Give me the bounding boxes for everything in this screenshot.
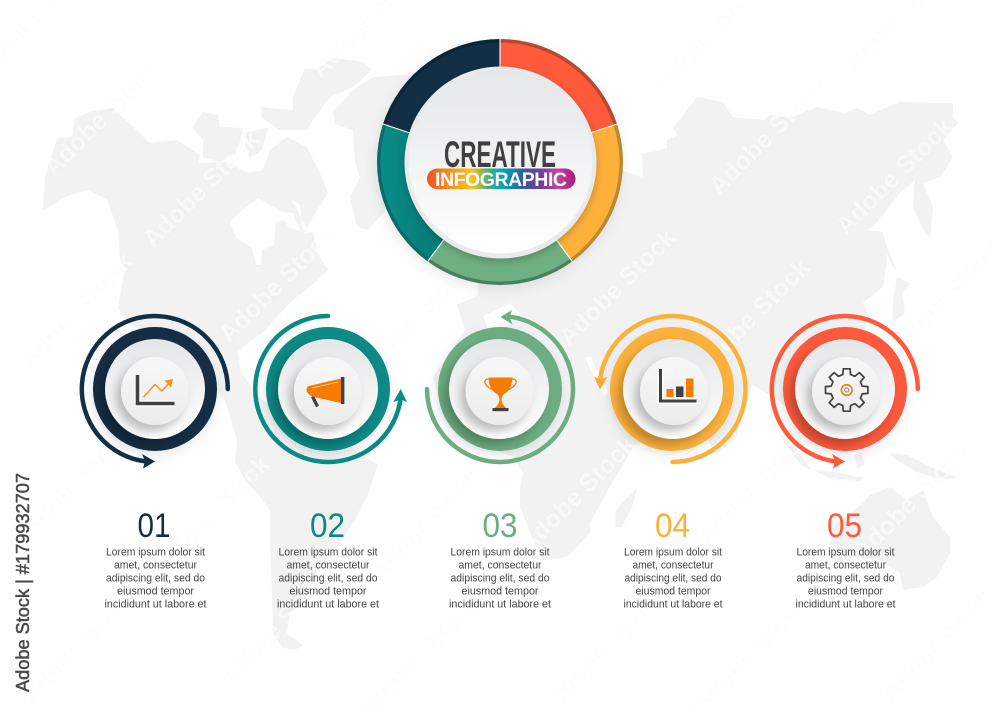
icon: line chart	[138, 375, 174, 404]
text block 3	[449, 507, 551, 610]
watermarks: Adobe Stock	[872, 580, 1000, 707]
side credit: Adobe Stock | #179932707	[13, 473, 33, 692]
body copy: incididunt ut labore et	[449, 598, 551, 610]
segment: navy	[386, 42, 500, 162]
arctic islands	[192, 58, 372, 162]
body copy: incididunt ut labore et	[104, 598, 206, 610]
ring	[610, 327, 734, 451]
centre disc	[404, 66, 596, 258]
body copy: amet, consectetur	[632, 560, 714, 572]
ring	[266, 327, 390, 451]
watermarks: Adobe Stock	[38, 53, 166, 181]
step 4	[594, 316, 745, 462]
body copy: amet, consectetur	[805, 560, 886, 572]
body copy: Lorem ipsum dolor sit	[624, 546, 722, 558]
ring	[783, 327, 907, 451]
body copy: eiusmod tempor	[290, 586, 367, 598]
ring	[93, 327, 217, 451]
island: Madagascar	[615, 488, 637, 527]
watermarks: Adobe Stock	[147, 450, 275, 578]
body copy: incididunt ut labore et	[796, 598, 896, 610]
ring	[438, 327, 562, 451]
body copy: adipiscing elit, sed do	[796, 572, 894, 584]
number 01: 01	[138, 507, 170, 545]
segment: red	[500, 42, 614, 162]
body copy: Lorem ipsum dolor sit	[796, 546, 894, 558]
watermarks: Adobe Stock	[10, 247, 138, 375]
icon: trophy	[485, 378, 516, 411]
outer disc	[623, 339, 723, 439]
body copy: eiusmod tempor	[636, 586, 711, 598]
arrow	[427, 310, 573, 462]
watermarks: Adobe Stock	[513, 430, 641, 558]
Greenland	[333, 74, 415, 230]
body copy: adipiscing elit, sed do	[450, 572, 550, 584]
body copy: amet, consectetur	[114, 560, 197, 572]
inner disc	[466, 357, 534, 425]
donut rim	[377, 39, 623, 285]
text block 4	[624, 507, 722, 610]
continents: Eurasia and Africa	[433, 97, 958, 560]
segment: teal	[381, 125, 500, 259]
arrow	[82, 316, 228, 468]
watermarks: Adobe Stock	[353, 255, 481, 383]
step 3	[427, 310, 573, 462]
icon: bar chart	[660, 369, 696, 401]
watermarks: Adobe Stock	[13, 417, 141, 545]
watermarks: Adobe Stock	[687, 253, 815, 381]
body copy	[104, 546, 206, 610]
centre disc face	[408, 70, 592, 254]
watermarks: Adobe Stock	[703, 72, 831, 200]
icon: megaphone	[306, 377, 344, 406]
segment: green	[430, 162, 570, 282]
watermarks: Adobe Stock	[830, 112, 958, 240]
watermarks: Adobe Stock	[553, 223, 681, 351]
text block 2	[277, 507, 379, 610]
body copy: incididunt ut labore et	[277, 598, 379, 610]
outer disc	[795, 339, 895, 439]
body copy: Lorem ipsum dolor sit	[106, 546, 205, 558]
outer disc	[105, 339, 205, 439]
body copy: amet, consectetur	[286, 560, 370, 572]
continent: Australia	[830, 487, 950, 590]
panel: central donut	[377, 39, 623, 285]
watermarks: Adobe Stock	[137, 125, 265, 253]
step 2	[255, 316, 407, 462]
body copy: adipiscing elit, sed do	[278, 572, 378, 584]
watermarks: Adobe Stock	[213, 220, 341, 348]
inner disc	[294, 357, 362, 425]
outer disc	[449, 339, 549, 439]
body copy: Lorem ipsum dolor sit	[278, 546, 378, 558]
title: CREATIVE: CREATIVE	[444, 134, 556, 175]
icon: gear	[826, 369, 868, 411]
arrow	[255, 316, 407, 462]
number 04: 04	[655, 507, 690, 545]
inner disc	[121, 357, 189, 425]
outer disc	[278, 339, 378, 439]
text block 5	[796, 507, 896, 610]
inner disc	[812, 357, 880, 425]
Mediterranean and Red Sea	[483, 303, 608, 396]
body copy	[277, 546, 379, 610]
body copy: amet, consectetur	[458, 560, 542, 572]
body copy	[796, 546, 896, 610]
continent: Americas	[43, 108, 378, 650]
number 02: 02	[310, 507, 345, 545]
watermarks: Adobe Stock	[847, 437, 975, 565]
body copy	[449, 546, 551, 610]
islands: Asia and Pacific	[780, 230, 957, 481]
watermarks: Adobe Stock	[212, 563, 340, 691]
text block 1	[104, 507, 206, 610]
segment separators	[383, 39, 617, 262]
body copy: adipiscing elit, sed do	[106, 572, 205, 584]
watermarks: Adobe Stock	[688, 423, 816, 551]
body copy	[624, 546, 722, 610]
number 03: 03	[482, 507, 518, 545]
body copy: incididunt ut labore et	[624, 598, 722, 610]
world map background	[43, 58, 958, 650]
body copy: eiusmod tempor	[808, 586, 883, 598]
number 05: 05	[827, 507, 862, 545]
inner disc	[640, 357, 708, 425]
watermarks: Adobe Stock	[360, 460, 488, 588]
body copy: adipiscing elit, sed do	[624, 572, 722, 584]
Hudson Bay	[230, 198, 307, 265]
body copy: Lorem ipsum dolor sit	[450, 546, 550, 558]
step 1	[82, 316, 228, 468]
body copy: eiusmod tempor	[462, 586, 539, 598]
segment: yellow	[500, 125, 619, 259]
arrow	[594, 316, 745, 462]
arrow	[772, 316, 918, 468]
body copy: eiusmod tempor	[117, 586, 194, 598]
step 5	[772, 316, 918, 468]
title pill: INFOGRAPHIC: INFOGRAPHIC	[435, 169, 567, 191]
